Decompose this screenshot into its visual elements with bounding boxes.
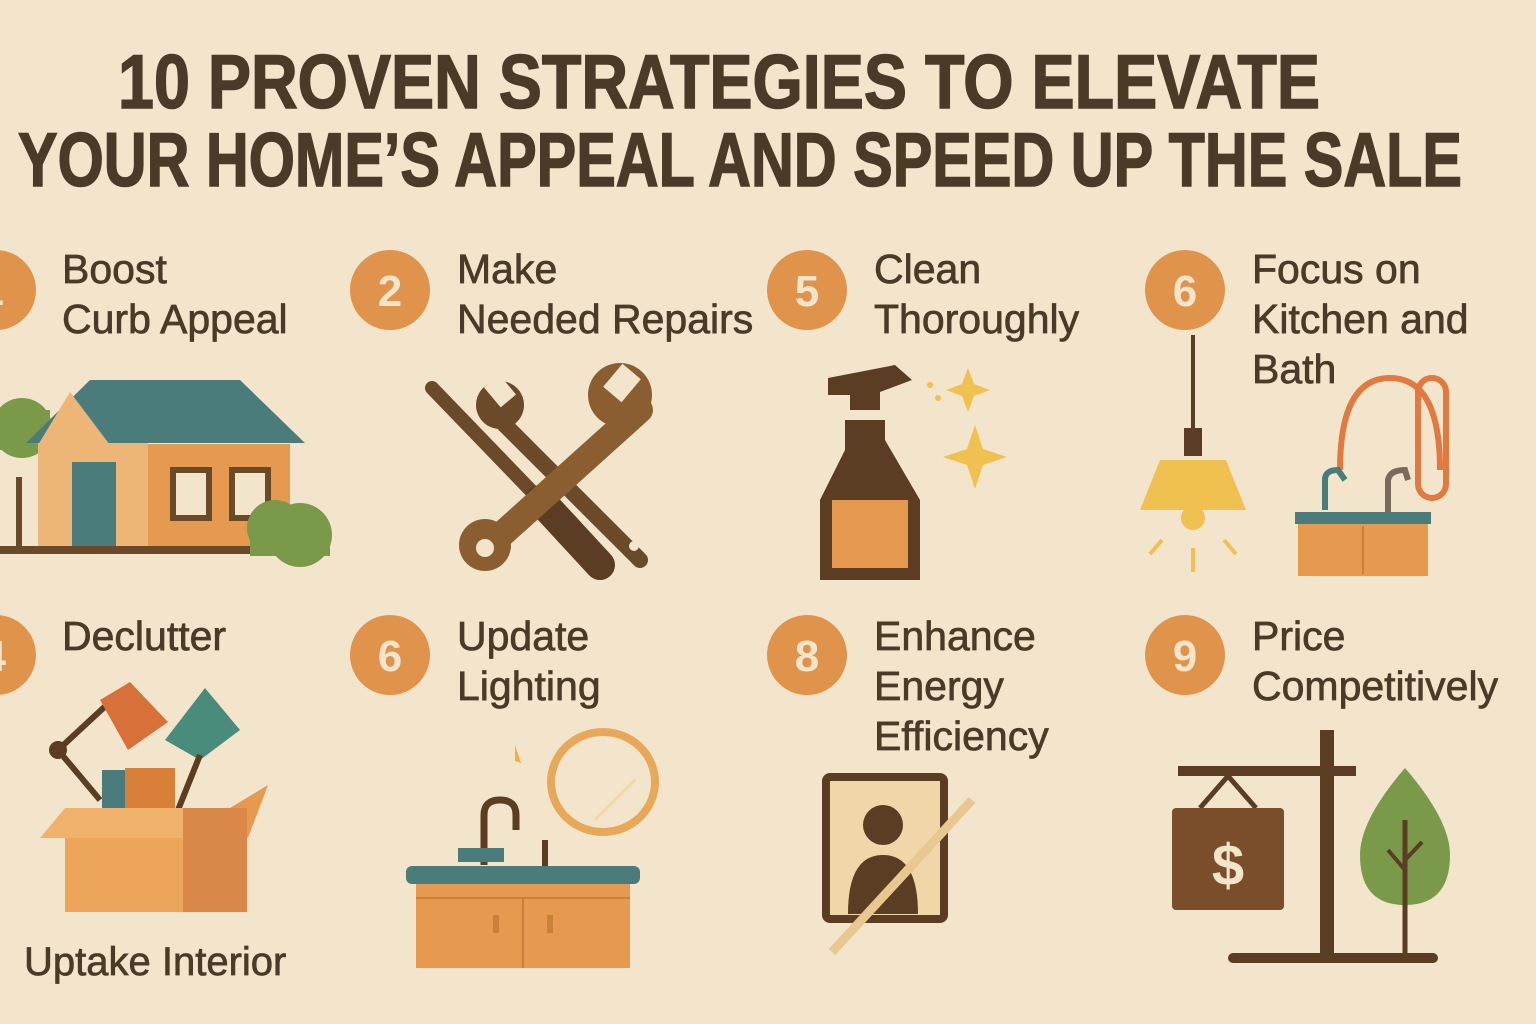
item 9: price competitively: Price [1252,613,1345,659]
icon: box with items [40,682,268,912]
item 6: focus on kitchen and bath [1140,246,1469,576]
item 6: focus on kitchen and bath: Focus on [1252,246,1421,292]
icon: framed portrait [826,777,972,952]
item 2: make needed repairs [350,246,753,571]
item 4: declutter: Declutter [62,613,226,659]
item 9: price competitively: 9 [1173,632,1197,681]
icon: tools [432,363,652,571]
item 8: enhance energy efficiency: Efficiency [874,713,1049,759]
item 2: make needed repairs: Needed Repairs [457,296,753,342]
icon: pendant lamp and sink [1140,335,1446,576]
item 9: price competitively [1145,613,1499,963]
item 6: focus on kitchen and bath: Bath [1252,346,1336,392]
item 5: clean thoroughly: Thoroughly [874,296,1080,342]
item 5: clean thoroughly: Clean [874,246,981,292]
item 5: clean thoroughly [767,246,1080,580]
item 8: enhance energy efficiency: 8 [795,632,819,681]
icon: vanity with mirror [406,732,655,968]
item 8: enhance energy efficiency: Enhance [874,613,1036,659]
item 1: boost curb appeal: Boost [62,246,167,292]
item 5: clean thoroughly: 5 [795,267,819,316]
icon: spray bottle [820,365,1007,580]
item 2: make needed repairs: 2 [378,267,402,316]
item 8: enhance energy efficiency: Energy [874,663,1004,709]
caption: uptake interior: Uptake Interior [24,940,286,984]
item 1: boost curb appeal: Curb Appeal [62,296,288,342]
title: 10 PROVEN STRATEGIES TO ELEVATE [118,40,1320,125]
item 6b: update lighting: Update [457,613,589,659]
item 6: focus on kitchen and bath: 6 [1173,267,1197,316]
item 9: price competitively: Competitively [1252,663,1499,709]
icon: price sign and tree [1172,730,1450,963]
item 6b: update lighting: 6 [378,632,402,681]
item 6: focus on kitchen and bath: Kitchen and [1252,296,1469,342]
title [18,40,1462,203]
item 6b: update lighting: Lighting [457,663,601,709]
item 6b: update lighting [350,613,655,968]
icon: house [0,380,332,567]
icon: price sign and tree: $ [1212,833,1244,898]
item 2: make needed repairs: Make [457,246,557,292]
item 4: declutter [0,613,286,984]
item 8: enhance energy efficiency [767,613,1049,952]
item 1: boost curb appeal [0,246,332,567]
